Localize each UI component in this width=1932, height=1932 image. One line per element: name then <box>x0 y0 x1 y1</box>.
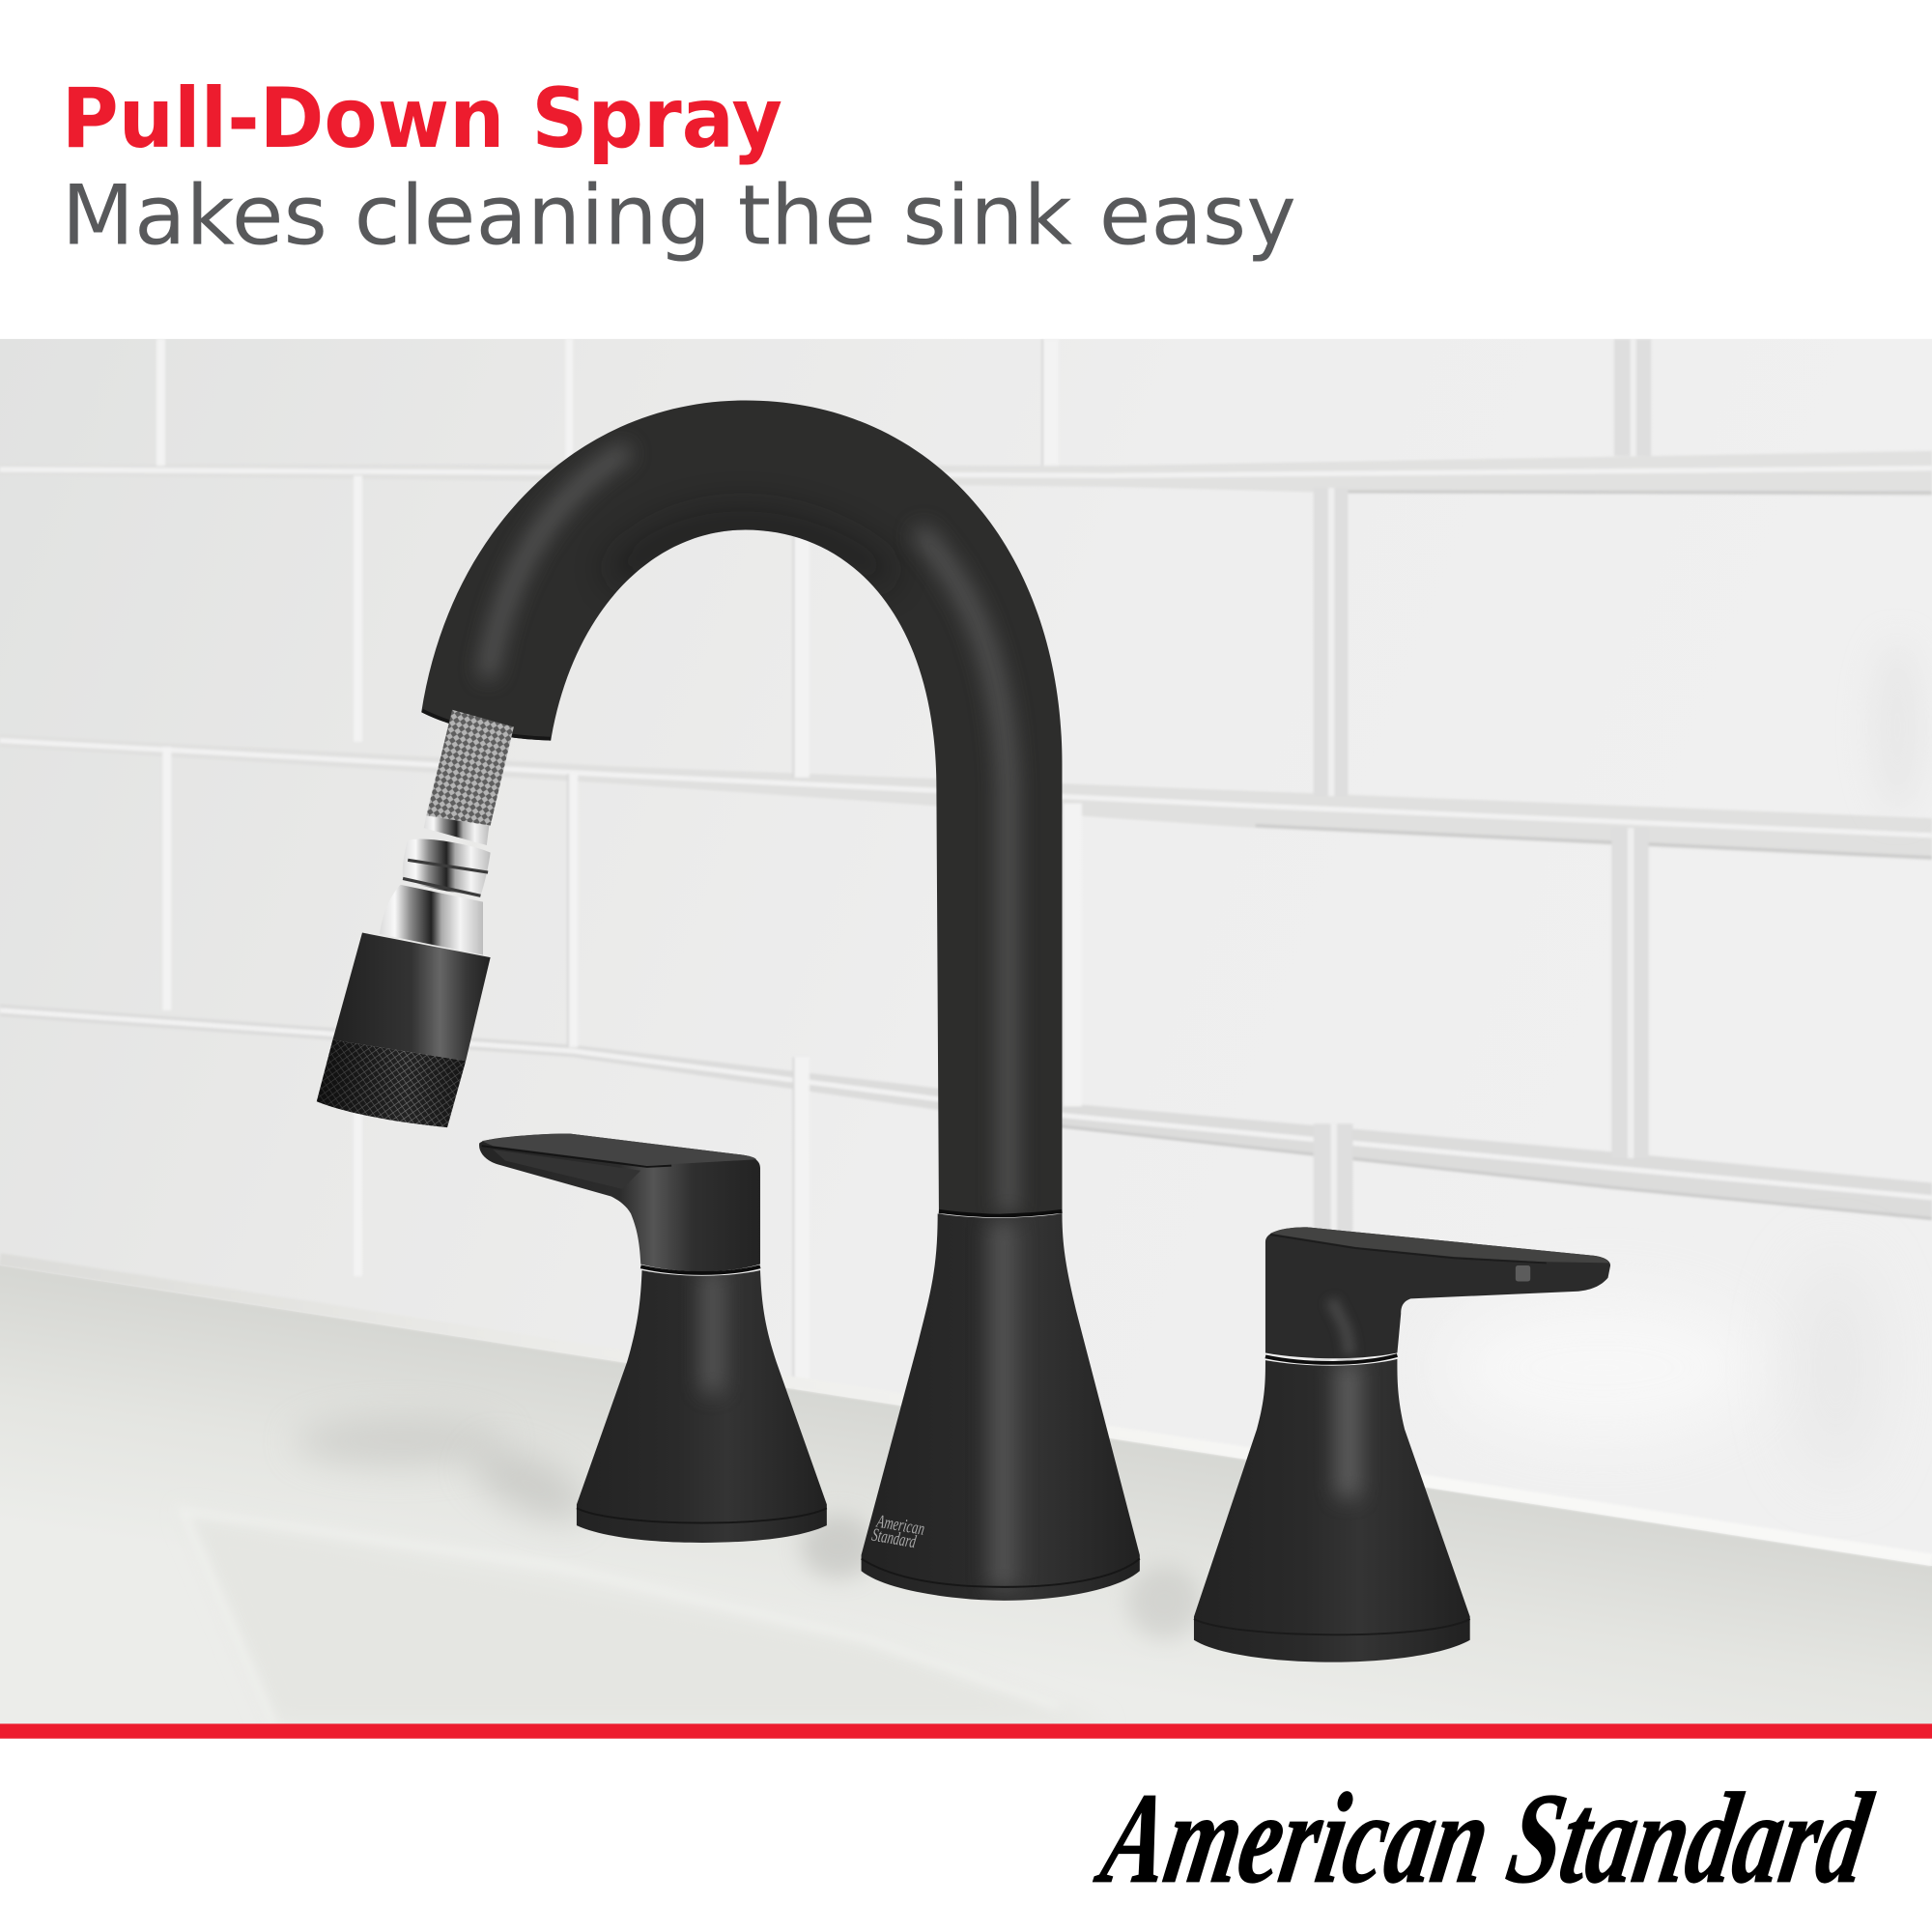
engraved small logo <box>871 1515 924 1548</box>
product photo panel <box>0 339 1932 1725</box>
engraved small logo: Standard <box>870 1525 918 1552</box>
black cylinder <box>332 933 491 1061</box>
subtitle: Makes cleaning the sink easy: Makes cleaning the sink easy <box>62 169 1296 265</box>
red divider bar <box>0 1723 1932 1739</box>
braided hose <box>426 710 514 826</box>
pull-down spray head <box>317 710 514 1127</box>
knurled nozzle ring <box>317 1040 466 1127</box>
right handle <box>1194 1227 1610 1662</box>
left handle <box>479 1133 827 1543</box>
faucet base with engraved logo <box>862 1213 1140 1601</box>
chrome connector <box>380 815 491 955</box>
counter top with sink bowl <box>0 1260 1932 1725</box>
faucet spout <box>421 401 1062 1215</box>
tiled wall <box>0 339 1932 1583</box>
engraved small logo: American <box>874 1511 926 1540</box>
title: Pull-Down Spray: Pull-Down Spray <box>62 71 782 167</box>
